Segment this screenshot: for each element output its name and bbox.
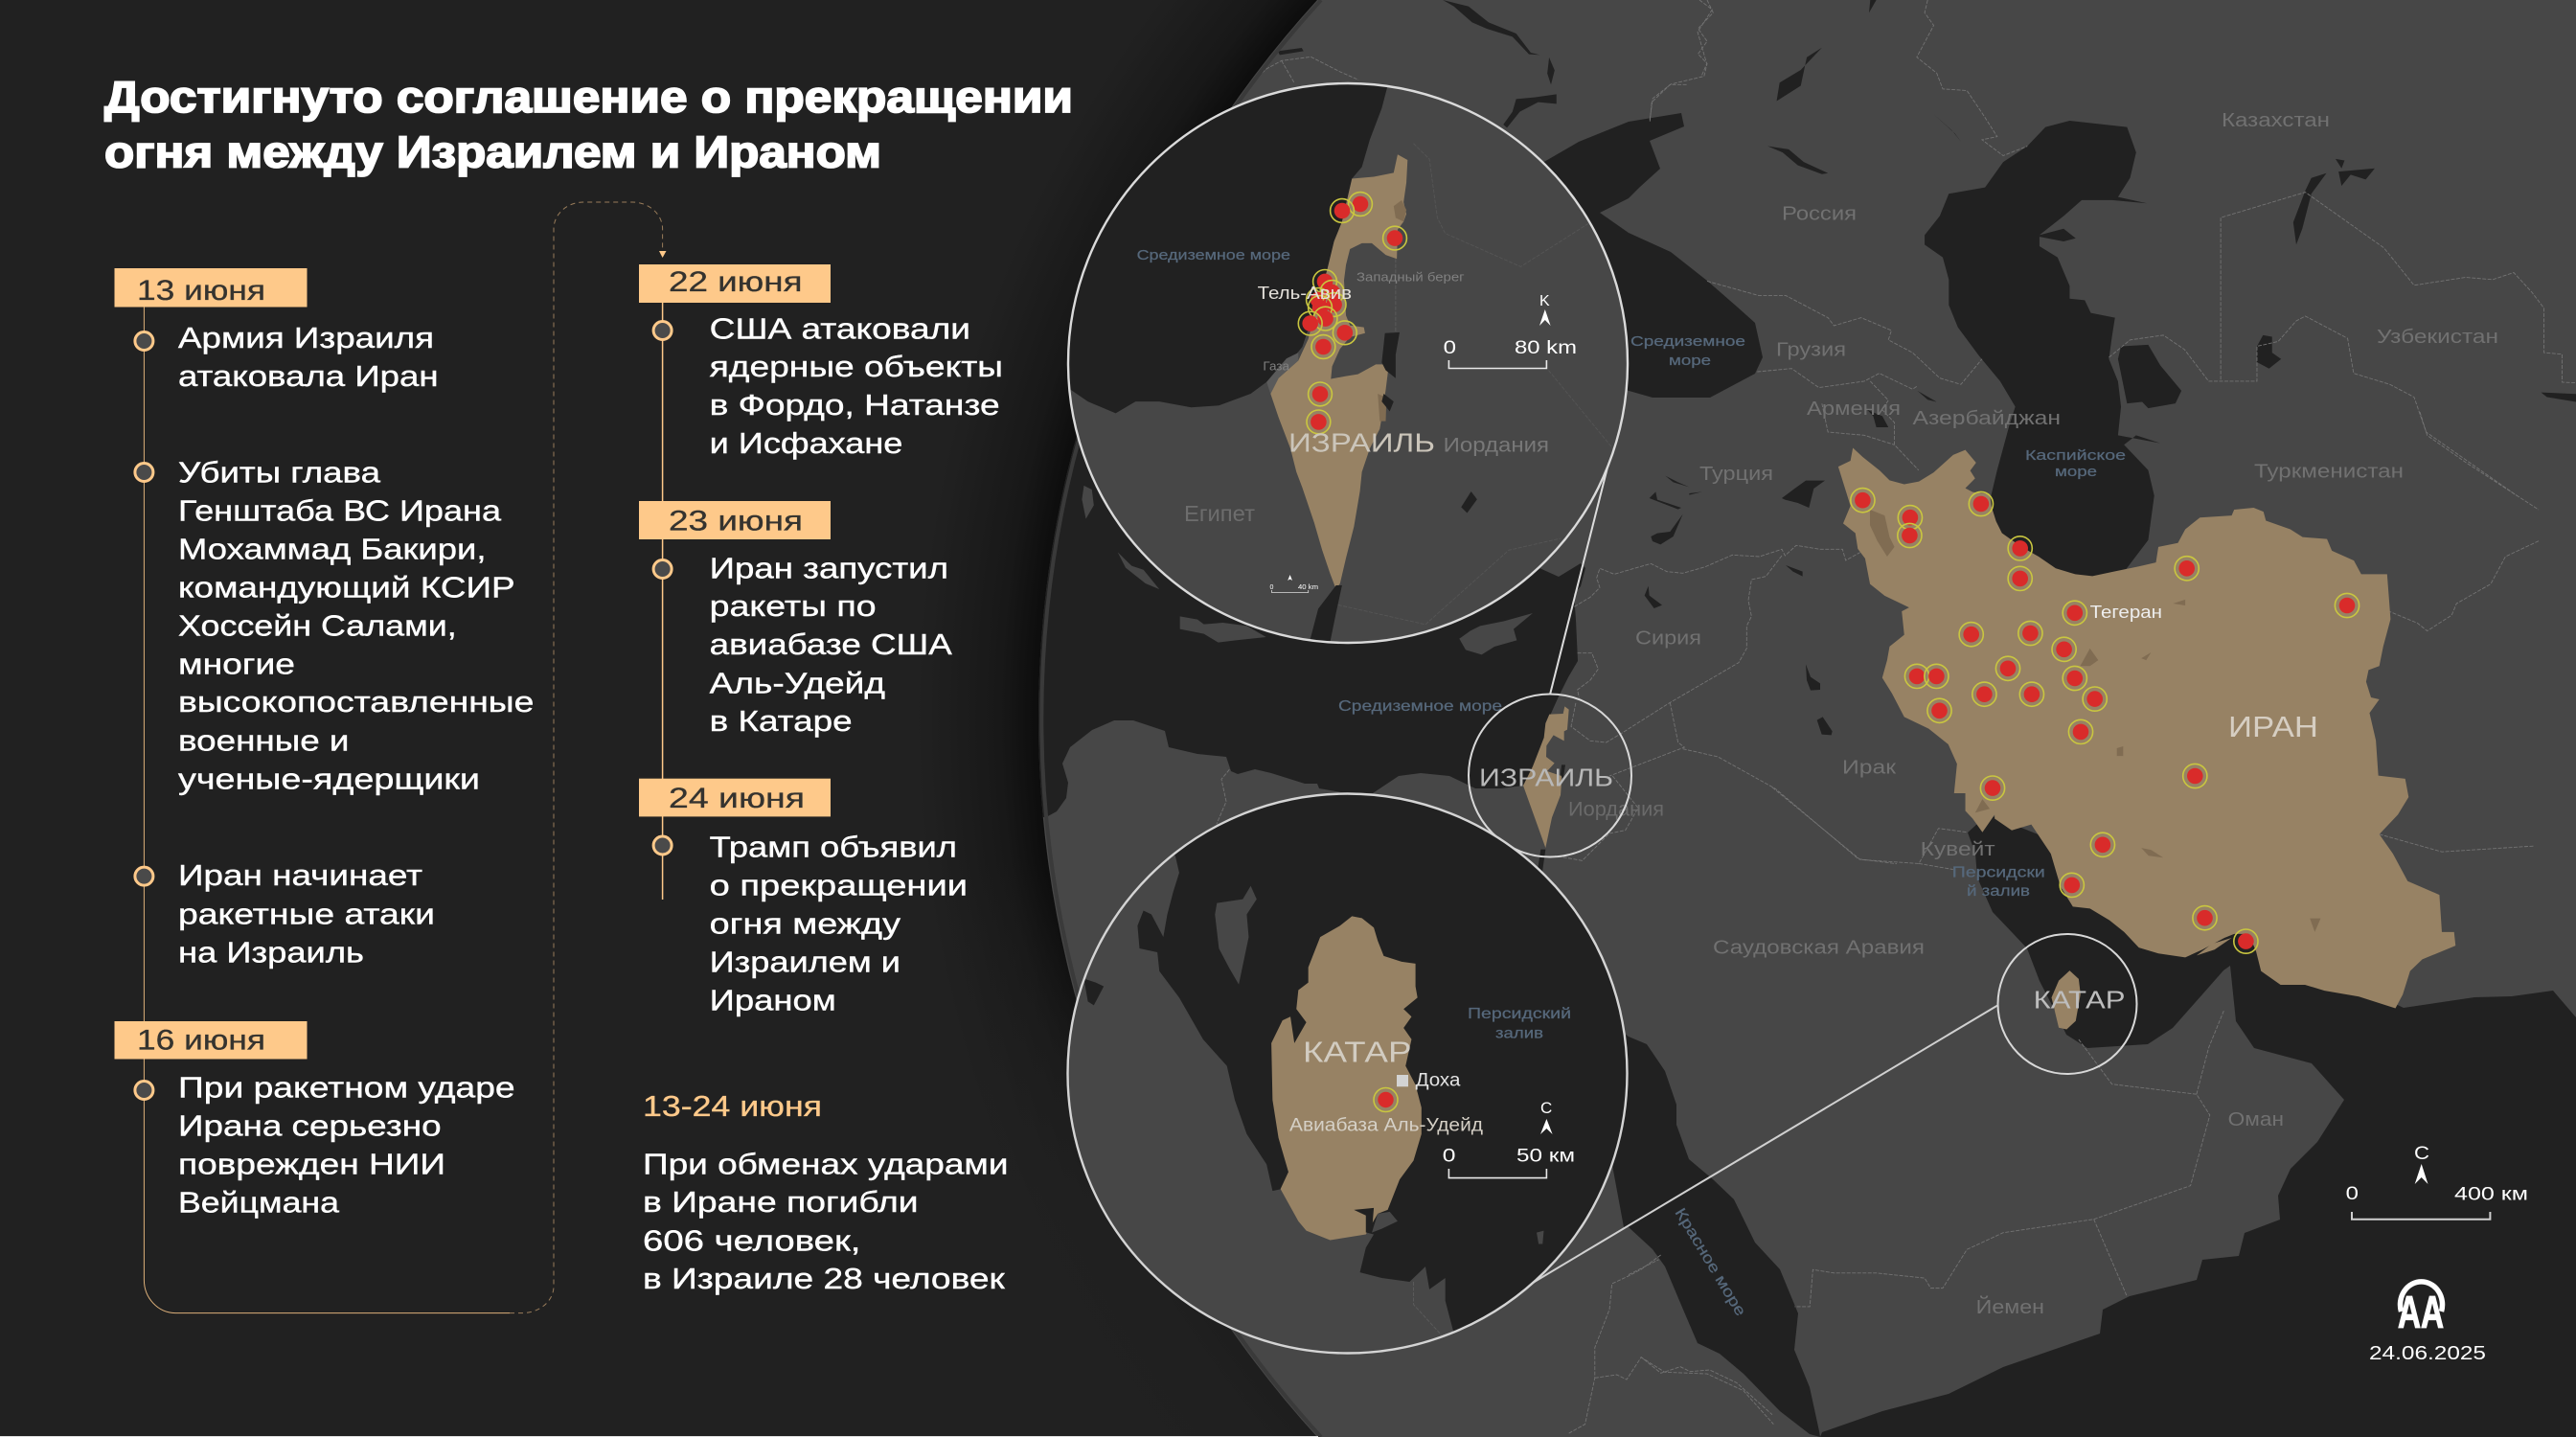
event: Iran starts missile attacks: на Израиль: [178, 935, 364, 969]
map labels: море: [2055, 464, 2097, 480]
inset labels: Тель-Авив: [1258, 284, 1352, 303]
map labels: Армения: [1807, 399, 1901, 420]
summary text: casualties: в Иране погибли: [643, 1185, 919, 1219]
event: officials killed: Мохаммад Бакири,: [178, 533, 487, 565]
small map Israel territory: [1523, 706, 1569, 848]
map labels: Турция: [1699, 464, 1773, 485]
map labels: море: [1669, 353, 1711, 369]
small circle: Qatar locator: [1998, 934, 2136, 1074]
inset scale bar and north arrow: 0: [1443, 1147, 1456, 1167]
event: US strikes: [653, 312, 1003, 460]
map labels: Казахстан: [2222, 110, 2330, 131]
Gaza: [1266, 353, 1298, 394]
arrow head: [659, 251, 667, 258]
logo: AA agency mark and date: 24.06.2025: [2369, 1343, 2486, 1364]
inset labels: КАТАР: [1303, 1036, 1412, 1069]
globe shadow: [862, 0, 1533, 1437]
map labels: Узбекистан: [2377, 327, 2498, 348]
main scale bar and north arrow: 400 км: [2454, 1185, 2528, 1205]
title: огня между Израилем и Ираном: [104, 126, 881, 176]
date tag: 24 июня: [639, 779, 831, 816]
event: officials killed: многие: [178, 648, 295, 680]
event: Trump announces ceasefire: Ираном: [710, 983, 836, 1017]
map labels: Йемен: [1976, 1295, 2044, 1318]
inset labels: Египет: [1184, 501, 1255, 526]
inset labels: Газа: [1263, 358, 1290, 374]
map labels: Кувейт: [1921, 839, 1995, 860]
inset scale bar and north arrow: 0: [1444, 338, 1456, 358]
event: Iran attacks Al Udeid: [653, 551, 952, 738]
map labels: Иордания: [1568, 799, 1664, 821]
event: Trump announces ceasefire: Трамп объявил: [710, 830, 957, 864]
inset mini scale: [1270, 575, 1318, 592]
timeline connector: first column: [144, 307, 510, 1313]
event: Weizmann institute: [135, 1071, 515, 1219]
date tag: 22 июня: 22 июня: [669, 266, 803, 298]
inset Bahrain and islands: [1215, 886, 1543, 1243]
inset scale bar and north arrow: С: [1540, 1099, 1552, 1117]
logo: AA agency mark and date: AA: [2398, 1287, 2444, 1337]
bottom edge line: [0, 1436, 1318, 1437]
islands: Cyprus and Crete: [1082, 486, 1533, 654]
inset labels: Западный берег: [1356, 270, 1465, 284]
inset lakes and gulf: [1310, 200, 1477, 642]
map: globe with land and seas: [1015, 0, 2576, 1437]
map labels: Сирия: [1635, 628, 1701, 650]
inset labels: [1289, 1006, 1571, 1136]
event: Israel attacks: [135, 321, 439, 393]
map labels: Тегеран: [2090, 603, 2162, 622]
summary heading: 13-24 июня: 13-24 июня: [643, 1089, 822, 1123]
inset labels: Персидский: [1468, 1006, 1571, 1022]
event: Weizmann institute: При ракетном ударе: [178, 1071, 515, 1104]
summary text: casualties: в Израиле 28 человек: [643, 1262, 1005, 1295]
summary text: casualties: [643, 1148, 1008, 1295]
map labels: Красное море: [1672, 1205, 1748, 1319]
map labels: [1338, 110, 2498, 1319]
event: Iran starts missile attacks: [135, 858, 435, 969]
event: officials killed: командующий КСИР: [178, 571, 515, 604]
Iran lakes and islands: [1870, 510, 2320, 932]
map labels: Средиземное море: [1338, 698, 1502, 715]
event: Iran attacks Al Udeid: ракеты по: [710, 589, 877, 623]
inset: Israel: [1068, 80, 1628, 643]
Qatar territory: [1271, 916, 1422, 1240]
inset labels: ИЗРАИЛЬ: [1288, 427, 1435, 457]
event: Iran attacks Al Udeid: авиабазе США: [710, 627, 952, 661]
title: Достигнуто соглашение о прекращении: [104, 72, 1073, 122]
event: officials killed: Генштаба ВС Ирана: [178, 494, 502, 527]
timeline connector: dashed link to second column: [510, 202, 663, 1313]
borders: [1217, 0, 2576, 1434]
inset strike markers: [1298, 193, 1406, 434]
event: Iran attacks Al Udeid: в Катаре: [710, 704, 853, 738]
summary text: casualties: 606 человек,: [643, 1224, 860, 1257]
event: officials killed: ученые-ядерщики: [178, 763, 480, 795]
timeline connector: second column: [662, 303, 664, 900]
event: US strikes: и Исфахане: [710, 426, 902, 460]
event: Weizmann institute: Вейцмана: [178, 1186, 340, 1219]
event: Iran starts missile attacks: Иран начинает: [178, 858, 422, 892]
main scale bar and north arrow: 0: [2346, 1184, 2359, 1204]
event: Trump announces ceasefire: огня между: [710, 906, 901, 941]
event: officials killed: Убиты глава: [178, 456, 381, 489]
summary text: casualties: При обменах ударами: [643, 1148, 1008, 1180]
small circle: Israel locator: [1469, 694, 1631, 856]
event: Trump announces ceasefire: о прекращении: [710, 868, 968, 902]
markers: strikes on Iran: [1851, 489, 2359, 953]
event: Iran attacks Al Udeid: Иран запустил: [710, 551, 948, 584]
sea: Persian Gulf, Gulf of Oman, Arabian Sea: [1820, 814, 2576, 1437]
map labels: Средиземное: [1630, 333, 1745, 350]
event: Israel attacks: Армия Израиля: [178, 321, 434, 354]
inset labels: [1137, 247, 1549, 526]
map labels: й залив: [1967, 883, 2030, 900]
inset strike marker: [1374, 1088, 1398, 1111]
event: Trump announces ceasefire: Израилем и: [710, 945, 900, 979]
event: Trump announces ceasefire: [653, 830, 968, 1017]
lakes: Turkey, Syria, Iraq: [1538, 476, 1833, 872]
inset labels: Доха: [1416, 1071, 1461, 1091]
title: [104, 72, 1073, 176]
sea: Mediterranean: [1038, 437, 1585, 817]
inset: Qatar: [1067, 793, 1627, 1354]
inset sea: [1068, 80, 1389, 413]
event: Weizmann institute: поврежден НИИ: [178, 1148, 445, 1180]
map labels: Саудовская Аравия: [1713, 938, 1925, 959]
map labels: Россия: [1782, 203, 1857, 224]
inset labels: Средиземное море: [1137, 247, 1290, 263]
inset mini scale: 0: [1270, 584, 1274, 591]
inset scale bar and north arrow: K: [1539, 293, 1550, 309]
event: Iran attacks Al Udeid: Аль-Удейд: [710, 666, 885, 699]
event: Iran starts missile attacks: ракетные атаки: [178, 897, 435, 930]
event: US strikes: США атаковали: [710, 312, 970, 345]
inset scale bar and north arrow: [1443, 1099, 1575, 1178]
inset scale bar and north arrow: 80 km: [1515, 338, 1577, 358]
event: officials killed: Хоссейн Салами,: [178, 609, 457, 642]
inset labels: Авиабаза Аль-Удейд: [1289, 1116, 1483, 1136]
rivers and reservoirs north: [1278, 0, 1557, 127]
map labels: Каспийское: [2025, 447, 2126, 464]
sea: Caspian: [1767, 0, 2576, 588]
small circle: Qatar locator: КАТАР: [2034, 985, 2126, 1014]
date tag: 22 июня: [639, 264, 831, 303]
date tag: 16 июня: [115, 1021, 307, 1060]
event: officials killed: военные и: [178, 724, 349, 757]
connector line: Qatar inset to locator: [1523, 1005, 1998, 1289]
small circle: Israel locator: ИЗРАИЛЬ: [1479, 764, 1613, 792]
inset Saudi land: [1068, 855, 1453, 1354]
date tag: 13 июня: 13 июня: [137, 275, 265, 307]
inset borders: [1338, 144, 1616, 625]
main scale bar and north arrow: С: [2414, 1144, 2429, 1164]
sea: Black Sea and Azov: [1533, 113, 1763, 398]
event: Israel attacks: атаковала Иран: [178, 359, 439, 393]
lakes north and east: [1767, 0, 2576, 427]
inset scale bar and north arrow: 50 км: [1516, 1147, 1575, 1167]
event: US strikes: в Фордо, Натанзе: [710, 388, 1000, 422]
globe rim: [1041, 0, 1321, 1437]
main scale bar and north arrow: [2346, 1144, 2528, 1220]
event: US strikes: ядерные объекты: [710, 350, 1003, 383]
event: officials killed: [135, 456, 534, 795]
event: officials killed: высокопоставленные: [178, 685, 534, 718]
small map Qatar territory: [2052, 970, 2081, 1030]
map labels: Ирак: [1842, 758, 1896, 779]
inset mini scale: 40 km: [1298, 584, 1318, 591]
logo: AA agency mark and date: [2369, 1282, 2486, 1364]
date tag: 13 июня: [115, 268, 307, 307]
sea: Red Sea: [1609, 1030, 1820, 1437]
map labels: Оман: [2228, 1109, 2284, 1130]
event: Weizmann institute: Ирана серьезно: [178, 1109, 442, 1142]
date tag: 24 июня: 24 июня: [669, 783, 805, 814]
inset scale bar and north arrow: [1444, 293, 1577, 368]
map labels: Азербайджан: [1912, 408, 2061, 429]
map labels: ИРАН: [2228, 710, 2318, 743]
map labels: Грузия: [1776, 339, 1846, 360]
map labels: Туркменистан: [2254, 462, 2404, 483]
date tag: 23 июня: 23 июня: [669, 506, 803, 536]
date tag: 16 июня: 16 июня: [137, 1025, 265, 1056]
connector line: Israel inset to locator: [1550, 460, 1609, 695]
inset labels: залив: [1495, 1026, 1543, 1042]
Israel territory: [1270, 154, 1407, 589]
Iran territory: [1838, 448, 2455, 1008]
map labels: Персидски: [1952, 865, 2045, 881]
date tag: 23 июня: [639, 501, 831, 539]
inset labels: Иордания: [1444, 434, 1549, 456]
